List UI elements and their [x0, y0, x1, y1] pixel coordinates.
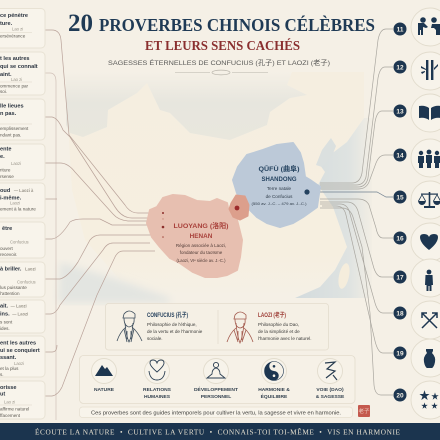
- subtitle: red: ET LEURS SENS CACHÉS: [145, 38, 300, 53]
- card 10: Lao zi: [4, 400, 15, 404]
- card 1: ce pénètre: [0, 13, 28, 19]
- theme: personal development: [194, 358, 238, 400]
- card 7: Confucius: [17, 280, 36, 284]
- card 5: oud — Laozi à: [0, 188, 34, 194]
- card 10: ffacement: [0, 413, 21, 418]
- item 20: stars: ★: [431, 402, 438, 410]
- item 13: book: 13: [396, 108, 404, 115]
- item 19: vase: 19: [396, 350, 404, 357]
- card 4: rsense: [0, 174, 14, 179]
- card 8: ins. — Laozi: [0, 312, 28, 318]
- card 8: s sont: [0, 320, 13, 324]
- card 2: aint.: [0, 72, 12, 78]
- card 4: [0, 144, 45, 180]
- card 10: orisse: [0, 385, 16, 391]
- text: Confucius: sociale.: [147, 336, 163, 341]
- region: Henan: (Laozi, VIᵉ siècle av. J.-C.): [177, 258, 226, 263]
- connector lines: right: [310, 29, 393, 395]
- item 20: stars: [394, 381, 440, 419]
- card 5: ement à la nature: [0, 206, 36, 212]
- card 6: être: [2, 226, 12, 232]
- card 3: emplissement: [0, 126, 29, 131]
- card 2: Lao zi: [11, 77, 22, 82]
- item 16: heart: 16: [396, 235, 404, 242]
- connector lines: left: [45, 30, 157, 420]
- item 20: stars: ★: [431, 392, 439, 401]
- item 13: book: [394, 94, 440, 132]
- card 3: n pas.: [0, 111, 17, 117]
- region: Shandong: (550 av. J.-C. – 479 av. J.-C.): [252, 201, 307, 206]
- card 8: ides.: [0, 326, 10, 331]
- card 10: ut: [0, 392, 5, 398]
- text: Laozi: l'harmonie avec le naturel.: [258, 336, 311, 341]
- theme: way: & SAGESSE: [316, 394, 345, 400]
- region: Henan: HENAN: [190, 233, 213, 240]
- item 14: group of people: 14: [396, 152, 404, 159]
- text: Confucius: Philosophie de l'éthique,: [147, 322, 197, 327]
- item 19: vase: [394, 339, 440, 377]
- theme: harmony: HARMONIE &: [258, 387, 290, 393]
- title: 20: [68, 10, 93, 37]
- card 4: Laozi: [11, 161, 21, 166]
- card 7: à briller. Laozi: [0, 266, 36, 272]
- theme: personal development: DÉVELOPPEMENT: [194, 385, 238, 393]
- card 2: ommence par: [0, 84, 29, 88]
- item 12: bamboo: 12: [396, 64, 404, 71]
- theme: human relations: HUMAINES: [144, 394, 171, 400]
- region: Shandong: [233, 143, 320, 227]
- card 8: ait. — Laozi: [0, 304, 27, 310]
- card 9: ent les autres: [0, 340, 36, 346]
- theme: harmony: [258, 358, 290, 400]
- item 14: group of people: [394, 139, 440, 177]
- item 17: standing person: [394, 259, 440, 297]
- text: Confucius: CONFUCIUS (孔子): [147, 311, 188, 319]
- card 4: riture: [0, 168, 11, 172]
- card 1: ersévérance: [0, 34, 26, 38]
- note: [80, 407, 352, 418]
- card 10: affirme naturel: [0, 406, 29, 412]
- right icon column: [394, 8, 440, 419]
- card 2: [0, 52, 45, 95]
- portrait: Confucius: [117, 311, 142, 342]
- text: Confucius: [147, 311, 203, 341]
- heading: Luoyang: LUOYANG (洛阳): [174, 221, 228, 230]
- text: Laozi: [258, 311, 311, 341]
- card 2: qui se connaît: [0, 64, 38, 70]
- item 15: scales: [394, 181, 440, 219]
- card 4: e.: [0, 154, 5, 160]
- theme: human relations: [143, 358, 172, 400]
- theme: way: VOIE (DAO): [316, 387, 344, 393]
- card 8: [0, 300, 45, 333]
- item 11: bowing people: 11: [397, 26, 404, 33]
- panel: themes: [80, 356, 355, 404]
- text: Laozi: de la simplicité et de: [258, 329, 300, 334]
- card 6: ouvert: [0, 246, 13, 251]
- item 12: bamboo: [394, 52, 440, 90]
- seal: 老子: [358, 407, 370, 415]
- card 3: lle lieues: [0, 104, 24, 110]
- map of China: [58, 72, 372, 303]
- portrait: Laozi: [227, 312, 253, 343]
- card 4: ente: [0, 146, 12, 152]
- card 3: ndant pas.: [0, 132, 21, 138]
- text: Confucius: de la vertu et de l'harmonie: [147, 329, 203, 334]
- region: Shandong: de Confucius: [266, 194, 293, 199]
- card 2: t les autres: [0, 56, 30, 62]
- item 20: stars: ★: [421, 402, 428, 410]
- panel: Confucius and Laozi: [106, 304, 328, 350]
- card 6: Confucius: [10, 240, 29, 244]
- footer band: [0, 423, 440, 440]
- seal: [358, 405, 370, 417]
- item 18: crossed arrows: [394, 301, 440, 339]
- item 16: heart: [394, 223, 440, 261]
- card 9: ui se conquiert: [0, 348, 40, 354]
- card 9: Laozi: [14, 361, 24, 366]
- marker: Luoyang-Qufu overlap: [229, 195, 249, 220]
- card 7: lus puissante: [0, 285, 27, 290]
- text: Laozi: Philosophie du Dao,: [258, 322, 299, 327]
- card 10: [0, 381, 45, 419]
- footer band: ÉCOUTE LA NATURE • CULTIVE LA VERTU • CONNAIS-TOI TOI-MÊME • VIS EN HARMONIE: [35, 426, 401, 436]
- item 11: bowing people: [394, 8, 440, 46]
- card 2: soi.: [0, 89, 7, 94]
- title words: PROVERBES CHINOIS CÉLÈBRES: [99, 14, 375, 35]
- card 5: [0, 183, 45, 218]
- text: Laozi: LAOZI (老子): [258, 311, 286, 319]
- region: Henan: [147, 195, 242, 277]
- card 9: [0, 336, 45, 377]
- theme: nature: NATURE: [94, 387, 115, 393]
- theme: human relations: RELATIONS: [143, 387, 172, 393]
- card 3: [0, 99, 45, 140]
- theme: way: [316, 358, 345, 400]
- item 15: scales: 15: [396, 194, 404, 201]
- item 20: stars: ★: [419, 390, 430, 402]
- subtitle: sources: SAGESSES ÉTERNELLES DE CONFUCIUS (孔子) ET LAOZI (老子): [108, 58, 330, 67]
- card 5: Laozi: [10, 200, 20, 206]
- card 9: et la plus: [0, 366, 19, 371]
- card 6: [0, 222, 45, 258]
- card 6: recevoir.: [0, 252, 17, 257]
- region: Shandong: Terre natale: [267, 186, 292, 191]
- card 1: [0, 8, 45, 48]
- card 7: l'attention: [0, 291, 20, 296]
- theme: personal development: PERSONNEL: [201, 394, 231, 400]
- left proverb cards: [0, 8, 45, 419]
- card 5: i-même.: [0, 196, 22, 202]
- card 9: ssant.: [0, 355, 17, 361]
- theme: harmony: ÉQUILIBRE: [261, 392, 288, 400]
- card 1: ture.: [0, 21, 13, 27]
- card 9: s.: [0, 372, 4, 377]
- item 18: crossed arrows: 18: [396, 310, 404, 317]
- theme: nature: [92, 358, 116, 393]
- region: Henan: Région associée à Laozi,: [176, 243, 226, 248]
- card 1: Lao zi: [12, 26, 23, 32]
- region: Henan: fondateur du taoïsme: [180, 250, 223, 255]
- heading: Qufu: QŪFÙ (曲阜): [258, 164, 300, 173]
- title: [68, 10, 375, 75]
- item 20: stars: 20: [396, 392, 404, 399]
- item 17: standing person: 17: [396, 274, 404, 281]
- region: Shandong: SHANDONG: [261, 177, 297, 183]
- note: Ces proverbes sont des guides intemporels pour cultiver la vertu, la sagesse et vivre en harmonie.: [91, 410, 341, 416]
- card 7: [0, 262, 45, 297]
